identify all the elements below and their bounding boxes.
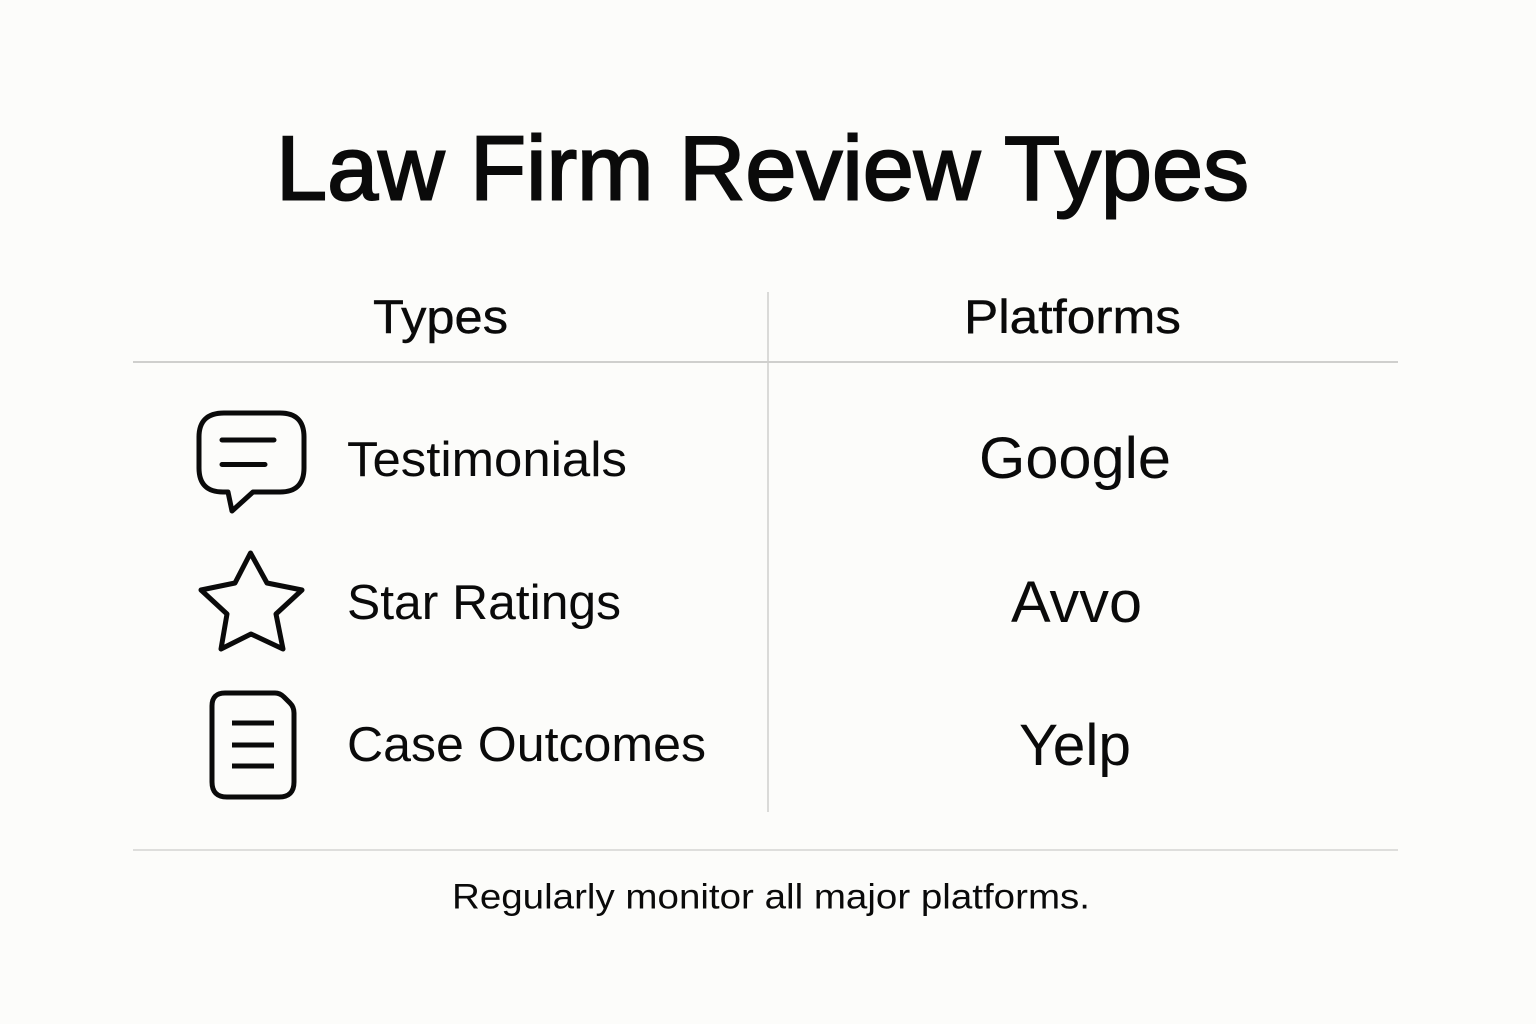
icon: speech bubble [199,413,304,511]
column heading: types: Types [373,290,508,343]
label: testimonials: Testimonials [347,433,627,487]
platform: google: Google [979,426,1171,491]
label: case outcomes: Case Outcomes [347,718,706,772]
platform: avvo: Avvo [1011,570,1142,635]
platform: yelp: Yelp [1019,713,1131,778]
icon: document [212,693,294,797]
footer note: Regularly monitor all major platforms. [452,878,1090,916]
title: Law Firm Review Types [276,118,1249,220]
label: star ratings: Star Ratings [347,576,621,630]
column heading: platforms: Platforms [964,290,1181,343]
icon: star [201,553,302,649]
